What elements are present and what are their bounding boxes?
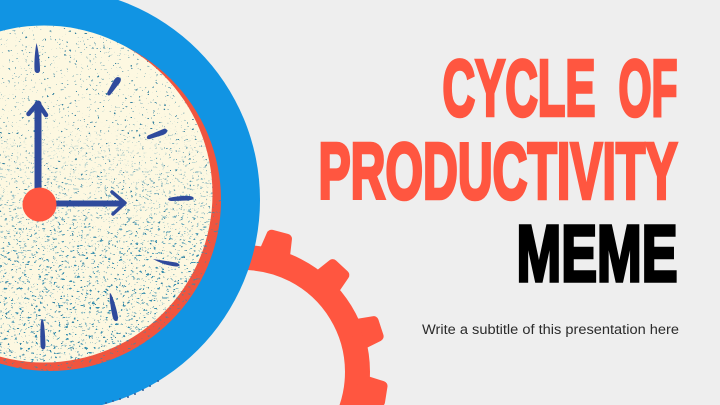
- hour arrowhead: [112, 192, 125, 214]
- hour ticks: [34, 43, 194, 350]
- red ring speckle: [3, 200, 221, 371]
- minute arrowhead: [28, 103, 46, 115]
- icon: clock: [0, 0, 260, 405]
- title: [318, 44, 678, 298]
- title line 1: CYCLE: [442, 44, 596, 132]
- icon: gear: [243, 234, 383, 405]
- gear teeth: [263, 234, 383, 405]
- clock face: [0, 26, 212, 362]
- clock blue rim: [0, 0, 260, 405]
- gear ring: [243, 258, 357, 405]
- subtitle: Write a subtitle of this presentation here: [422, 322, 679, 337]
- minute hand: [34, 104, 42, 200]
- clock red inner ring: [0, 29, 221, 371]
- face speckle: [0, 20, 220, 370]
- clock center pin: [22, 188, 56, 222]
- rim edge speckle: [105, 380, 159, 404]
- clock hands: [28, 103, 125, 214]
- hour hand: [50, 200, 122, 206]
